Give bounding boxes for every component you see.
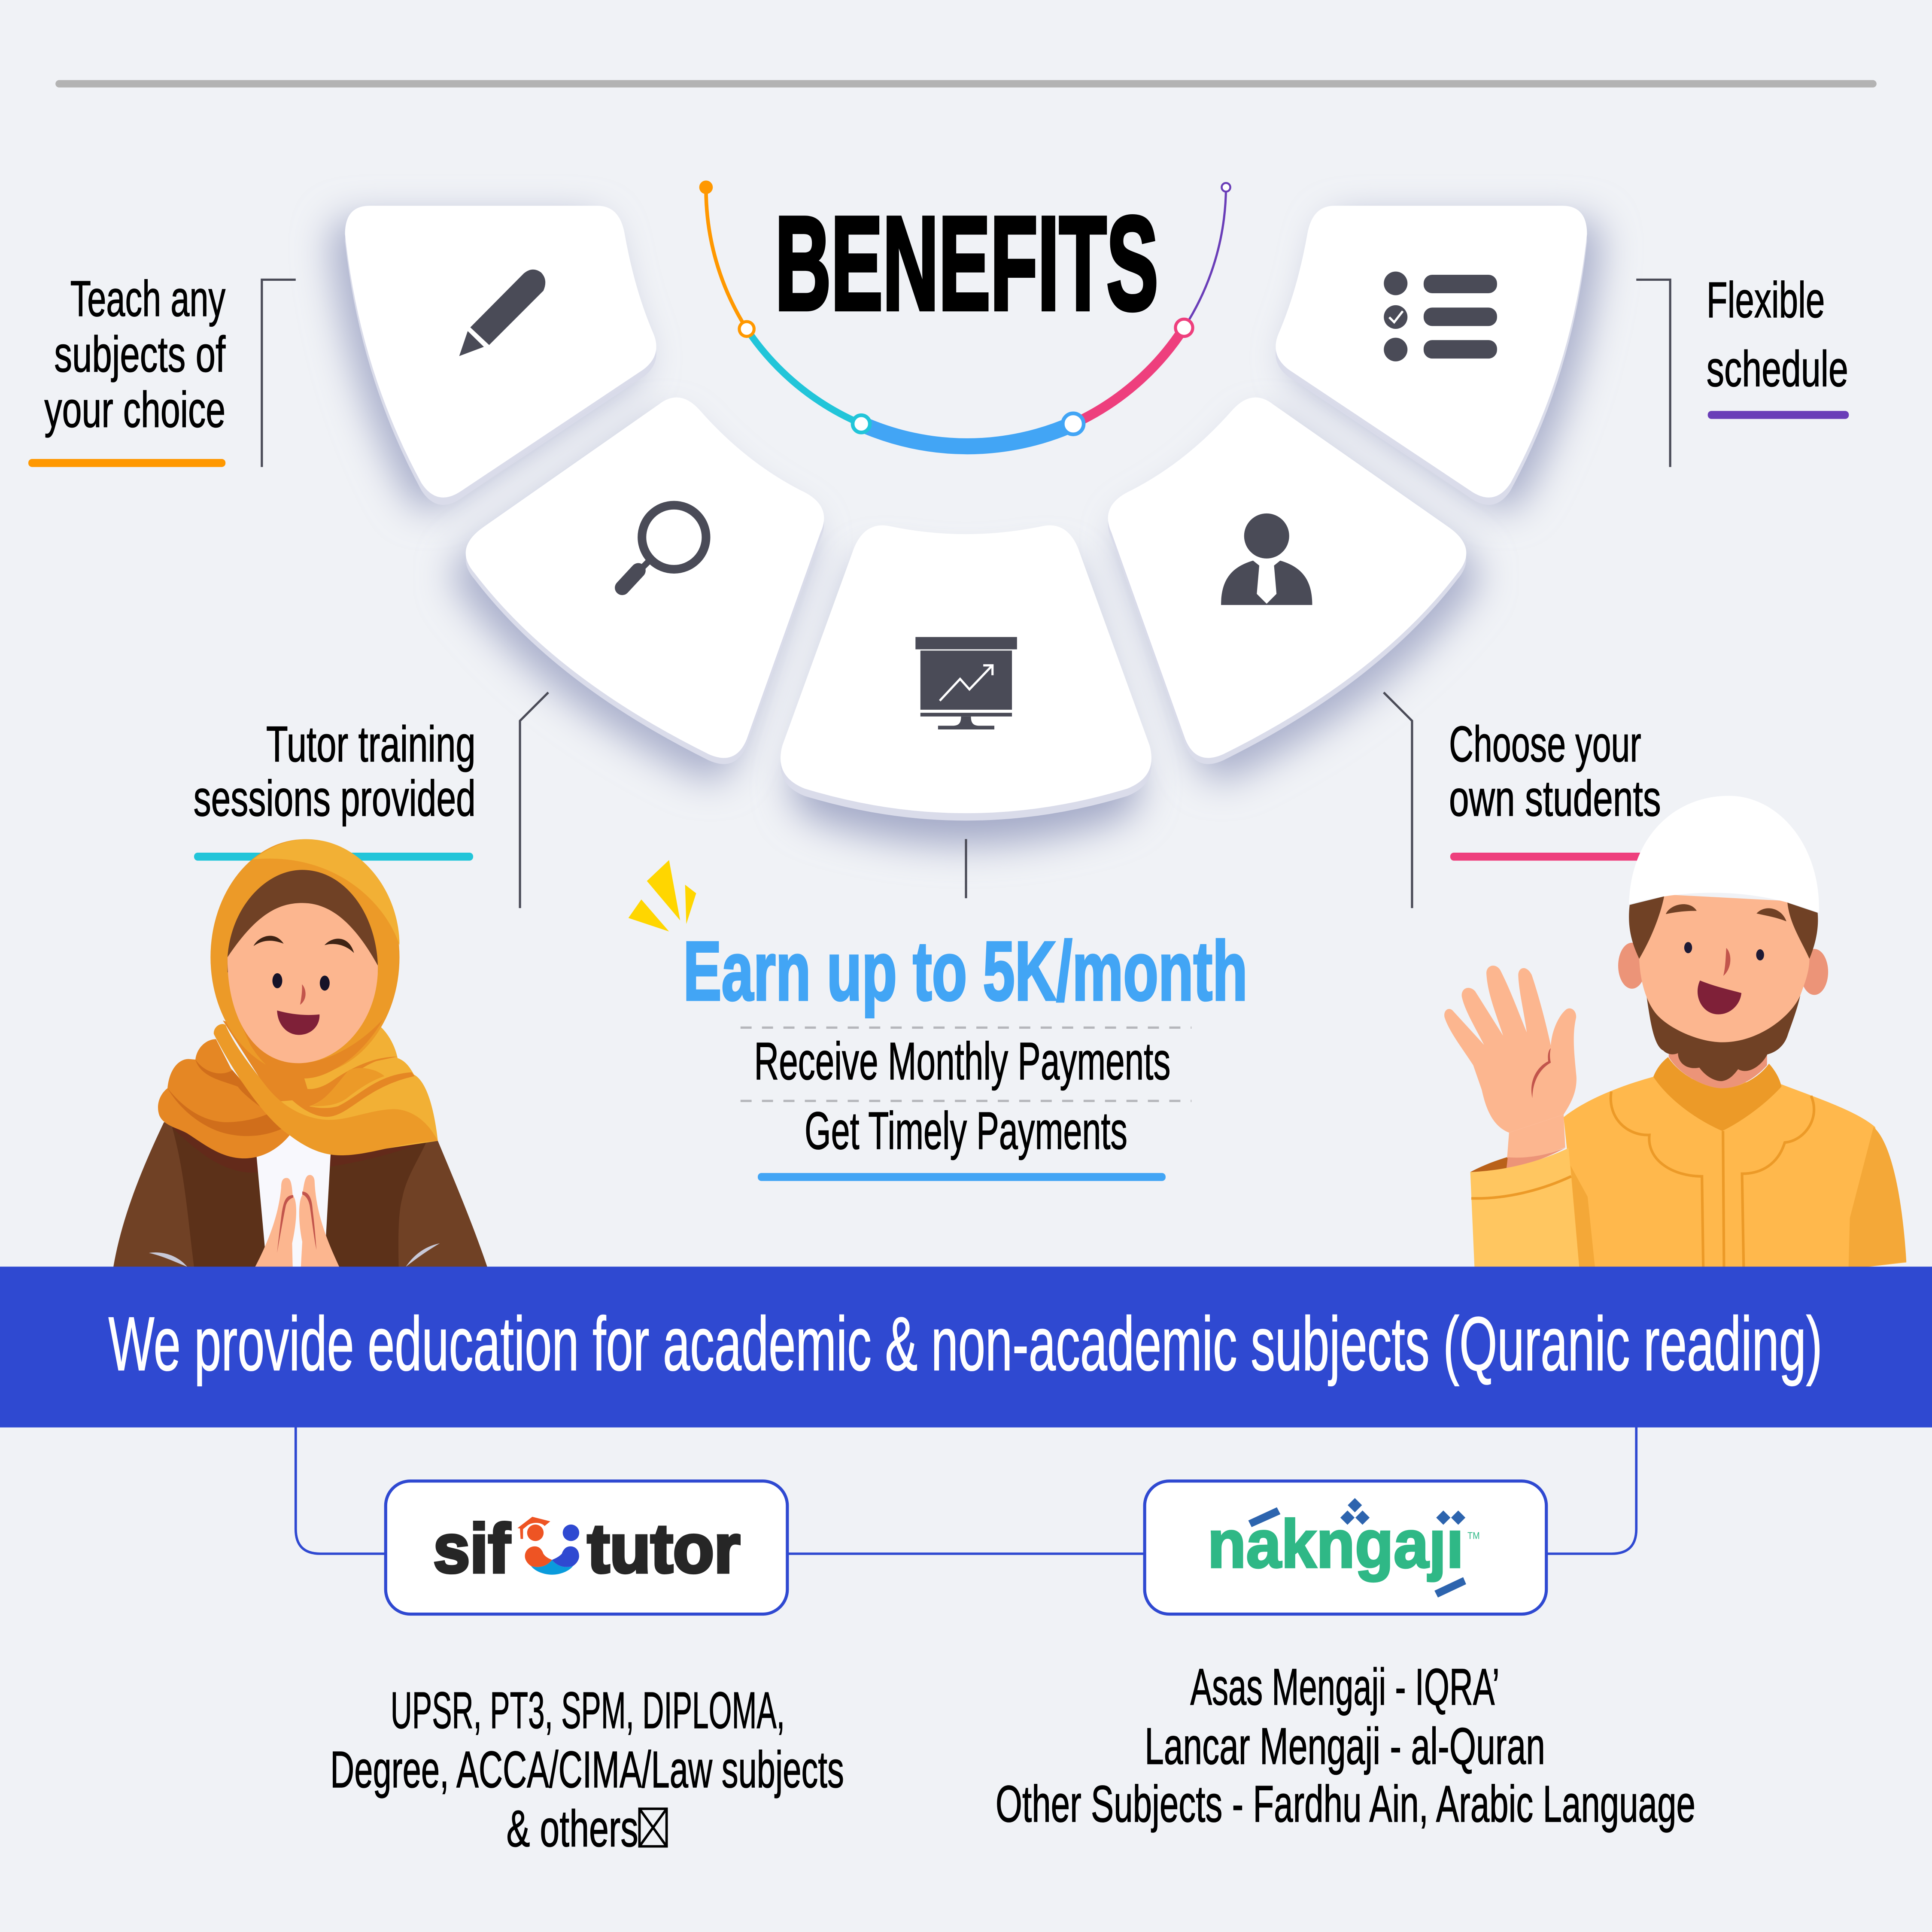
text block: academic subjects: UPSR, PT3, SPM, DIPLOMA, xyxy=(391,1681,785,1739)
connector: teach bracket xyxy=(262,279,296,467)
connector: banner to logos xyxy=(296,1427,1636,1554)
icon: pencil xyxy=(459,270,545,356)
connector: tutor training xyxy=(520,693,548,908)
icon: magnifying glass xyxy=(622,505,706,588)
callout: choose your students: Choose your xyxy=(1449,716,1641,772)
icon: presentation screen xyxy=(915,637,1017,729)
logo box: nakngaji: nakngaji xyxy=(1207,1506,1464,1582)
text block: quranic subjects xyxy=(996,1658,1695,1833)
panel: flexible schedule card xyxy=(1276,206,1602,510)
chart: coloured arc with nodes xyxy=(699,180,1230,447)
callout: earn up to 5K per month: Earn up to 5K/month xyxy=(683,925,1248,1018)
logo box: nakngaji xyxy=(1145,1481,1546,1614)
icon: yellow burst xyxy=(629,860,696,932)
top rule xyxy=(55,80,1877,88)
icon: missing glyph box xyxy=(639,1809,667,1847)
connector: choose students xyxy=(1384,693,1412,908)
callout: earn up to 5K per month xyxy=(683,925,1248,1181)
text block: academic subjects xyxy=(330,1681,844,1857)
logo box: siftutor xyxy=(386,1481,787,1614)
callout: tutor training: sessions provided xyxy=(194,770,476,827)
callout: tutor training: Tutor training xyxy=(266,716,476,772)
callout: flexible schedule: schedule xyxy=(1707,341,1848,398)
callout: tutor training xyxy=(194,716,476,861)
logo box: siftutor: sif xyxy=(433,1510,510,1587)
callout: teach any subjects xyxy=(28,270,226,467)
panel: earnings card xyxy=(781,526,1151,845)
panel: choose students card xyxy=(1108,398,1479,780)
text block: quranic subjects: Asas Mengaji - IQRA’ xyxy=(1190,1658,1500,1716)
callout: earn up to 5K per month: Receive Monthly Payments xyxy=(754,1033,1170,1092)
illustration: woman in hijab xyxy=(113,839,487,1267)
panel: teach any subjects card xyxy=(330,206,656,510)
callout: teach any subjects: subjects of xyxy=(54,326,226,383)
panel: blue banner xyxy=(0,1267,1932,1428)
callout: earn up to 5K per month: Get Timely Payments xyxy=(805,1102,1127,1161)
callout: choose your students: own students xyxy=(1449,770,1661,827)
connector: flexible bracket xyxy=(1636,279,1670,467)
icon: diamonds and slashes xyxy=(1248,1498,1466,1598)
icon: checklist xyxy=(1384,272,1497,361)
callout: flexible schedule: Flexible xyxy=(1707,272,1825,328)
icon: person with tie xyxy=(1221,513,1312,605)
callout: teach any subjects: your choice xyxy=(44,381,225,438)
callout: choose your students xyxy=(1449,716,1661,861)
icon: smiling graduate mark xyxy=(517,1517,579,1575)
logo box: nakngaji: TM xyxy=(1467,1530,1480,1541)
text block: quranic subjects: Lancar Mengaji - al-Quran xyxy=(1145,1717,1545,1775)
callout: flexible schedule xyxy=(1707,272,1849,419)
text block: academic subjects: Degree, ACCA/CIMA/Law subjects xyxy=(330,1741,844,1798)
illustration: man in kufi xyxy=(1444,796,1906,1269)
panel: tutor training card xyxy=(453,398,824,780)
title: BENEFITS xyxy=(775,188,1158,337)
logo box: siftutor: tutor xyxy=(587,1510,740,1587)
text block: academic subjects: & others xyxy=(507,1799,638,1857)
callout: teach any subjects: Teach any xyxy=(70,270,226,327)
